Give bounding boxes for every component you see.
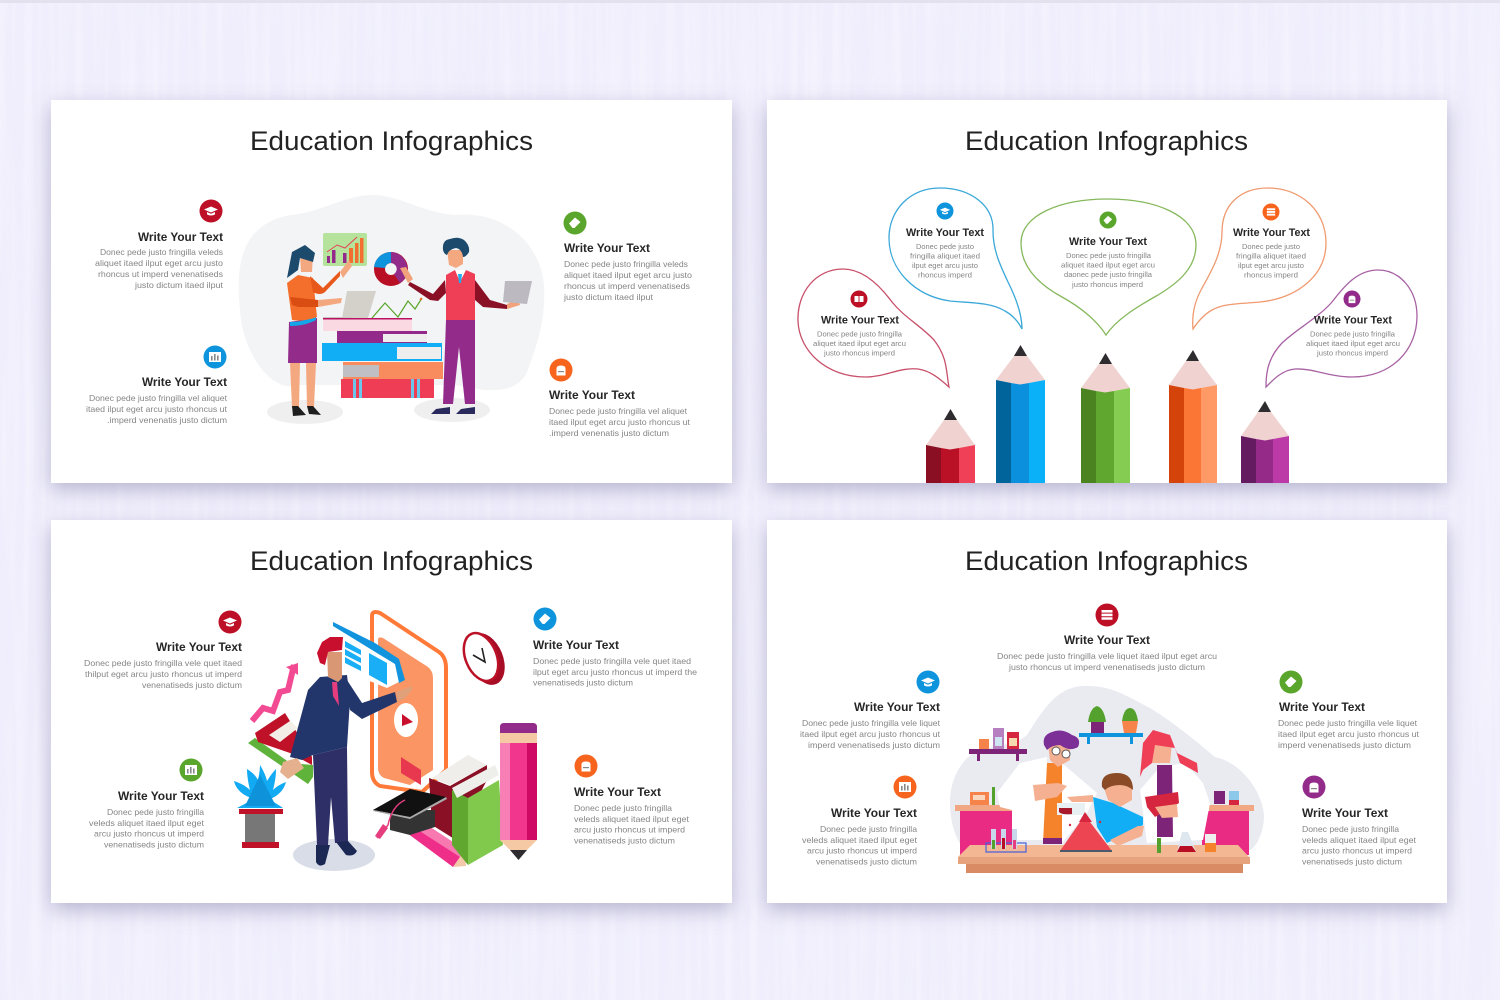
block: top left: Write Your Text <box>156 642 242 654</box>
block: top center: Donec pede justo fringilla vele liquet itaed ilput eget arcu <box>997 652 1217 661</box>
icon: cap <box>200 200 222 222</box>
clock <box>460 628 512 690</box>
block: lower right: veleds aliquet itaed ilput eget <box>1302 836 1417 845</box>
block: top left <box>84 610 242 690</box>
block: bottom right: itaed ilput eget arcu justo rhoncus ut <box>549 418 691 427</box>
cabinets <box>960 811 1249 855</box>
bubble: orange: Donec pede justo <box>1242 242 1300 251</box>
bubble: purple: Write Your Text <box>1314 314 1392 326</box>
block: top right: venenatiseds justo dictum <box>533 678 633 688</box>
block: bottom right <box>549 358 691 438</box>
heading: Education Infographics <box>250 126 533 156</box>
block: lower right <box>1302 776 1417 866</box>
icon: eraser <box>564 212 586 234</box>
block: upper left: Write Your Text <box>854 702 940 714</box>
growth line <box>372 298 422 318</box>
block: upper left: itaed ilput eget arcu justo rhoncus ut <box>800 730 941 739</box>
illustration: teacher, phone, books, pencil <box>234 612 537 871</box>
shelves <box>969 749 1027 761</box>
bubble: red: Donec pede justo fringilla <box>817 330 903 338</box>
block: lower right: Donec pede justo fringilla <box>1302 825 1399 834</box>
bubble: orange: ilput eget arcu justo <box>1238 261 1304 270</box>
block: lower right: Write Your Text <box>1302 808 1388 820</box>
pencil: blue <box>996 345 1045 483</box>
scientist man <box>997 757 1047 840</box>
block: top right: rhoncus ut imperd venenatiseds <box>564 282 690 291</box>
block: lower left: veleds aliquet itaed ilput eget <box>802 836 918 845</box>
block: top left: Write Your Text <box>138 232 223 244</box>
block: bottom left: .imperd venenatis justo dictum <box>107 416 227 425</box>
block: top right: Donec pede justo fringilla vele quet itaed <box>533 657 691 666</box>
heading: Education Infographics <box>965 546 1248 576</box>
icon: backpack <box>574 754 598 778</box>
icon: eraser <box>1280 670 1302 694</box>
block: top left: rhoncus ut imperd venenatiseds <box>98 270 223 279</box>
bubble: purple: justo rhoncus imperd <box>1316 348 1388 358</box>
block: bottom right: arcu justo rhoncus ut imperd <box>574 826 685 834</box>
bubble: orange: Write Your Text <box>1233 227 1310 239</box>
bubble: blue: fringilla aliquet itaed <box>910 252 980 260</box>
block: top right: justo dictum itaed ilput <box>563 293 654 302</box>
bubble: green: Donec pede justo fringilla <box>1066 251 1152 260</box>
bubble: red <box>798 269 949 387</box>
man <box>443 320 475 404</box>
icon: eraser <box>534 608 556 630</box>
block: bottom right: Donec pede justo fringilla <box>574 804 672 813</box>
graduation cap <box>390 810 435 835</box>
block: bottom left: Donec pede justo fringilla <box>107 808 204 817</box>
block: upper right: imperd venenatiseds justo dictum <box>1278 741 1411 750</box>
block: top right: aliquet itaed ilput eget arcu justo <box>564 271 692 280</box>
block: bottom left: Write Your Text <box>118 791 204 803</box>
block: upper left: Donec pede justo fringilla vele liquet <box>802 719 941 728</box>
block: top right <box>533 608 697 688</box>
bubble: purple: Donec pede justo fringilla <box>1310 330 1396 338</box>
block: bottom right <box>574 754 690 846</box>
block: upper right <box>1278 670 1420 750</box>
icon: chart <box>180 758 202 782</box>
block: lower right: venenatiseds justo dictum <box>1302 858 1402 866</box>
block: top center: Write Your Text <box>1064 635 1150 647</box>
block: upper right: itaed ilput eget arcu justo rhoncus ut <box>1278 730 1420 739</box>
block: top center <box>997 604 1217 672</box>
big pencil <box>500 723 537 733</box>
block: top left: thilput eget arcu justo rhoncus ut imperd <box>85 670 242 679</box>
bubble: green: aliquet itaed ilput eget arcu <box>1061 260 1155 270</box>
block: top right <box>563 212 692 302</box>
block: lower right: arcu justo rhoncus ut imperd <box>1302 846 1412 856</box>
block: top right: ilput eget arcu justo rhoncus ut imperd the <box>533 668 697 677</box>
block: top left: venenatiseds justo dictum <box>142 681 242 690</box>
block: lower left: venenatiseds justo dictum <box>816 858 917 866</box>
volcano <box>1060 822 1112 851</box>
pencil: orange <box>1169 350 1217 483</box>
woman <box>290 363 316 408</box>
pencil: red <box>926 409 975 483</box>
bubble: orange: fringilla aliquet itaed <box>1236 252 1306 260</box>
bubble: blue: rhoncus imperd <box>918 270 972 280</box>
block: top left: Donec pede justo fringilla vele quet itaed <box>84 659 242 668</box>
bubble: green: Write Your Text <box>1069 236 1147 248</box>
chart board <box>323 233 367 266</box>
bubble: blue <box>889 188 1022 329</box>
bubble: green: daonec pede justo fringilla <box>1064 270 1153 279</box>
upright books <box>429 765 487 840</box>
donut <box>380 258 402 280</box>
plant <box>234 765 286 808</box>
bubble: blue: Write Your Text <box>906 227 984 239</box>
table <box>958 845 1249 857</box>
icon: cap <box>218 610 242 634</box>
counter items <box>970 792 989 805</box>
block: top center: justo rhoncus ut imperd venenatiseds justo dictum <box>1008 663 1205 672</box>
block: bottom right: veleds aliquet itaed ilput eget <box>574 815 690 824</box>
bubble: purple: aliquet itaed ilput eget arcu <box>1306 339 1400 348</box>
illustration: science lab <box>950 686 1264 873</box>
pencil: purple <box>1241 401 1289 483</box>
block: lower left: Write Your Text <box>831 808 917 820</box>
panel: people with books <box>51 100 732 483</box>
block: bottom left: venenatiseds justo dictum <box>104 840 204 850</box>
icon: cap <box>916 670 940 694</box>
block: bottom right: Write Your Text <box>549 390 635 402</box>
block: top left: aliquet itaed ilput eget arcu justo <box>95 259 223 268</box>
bubble: red: Write Your Text <box>821 314 899 326</box>
block: lower left: arcu justo rhoncus ut imperd <box>807 846 917 856</box>
laptop on books <box>342 291 376 318</box>
bubble: orange: rhoncus imperd <box>1244 270 1298 280</box>
block: bottom left: arcu justo rhoncus ut imperd <box>94 830 204 838</box>
bubble: green: justo rhoncus imperd <box>1071 280 1143 289</box>
pink book <box>407 827 465 867</box>
block: bottom left: Write Your Text <box>142 377 227 389</box>
panel: pencils with speech bubbles <box>767 100 1447 483</box>
block: bottom left: Donec pede justo fringilla vel aliquet <box>89 394 228 403</box>
block: bottom left <box>89 758 205 850</box>
panel: science lab <box>767 520 1447 903</box>
block: upper right: Write Your Text <box>1279 702 1365 714</box>
block: upper left: imperd venenatiseds justo dictum <box>808 741 940 750</box>
block: top right: Write Your Text <box>564 243 650 255</box>
man <box>313 747 348 845</box>
flasks <box>1177 832 1196 852</box>
block: bottom right: Write Your Text <box>574 787 661 799</box>
book stack <box>323 318 412 331</box>
bubble: red: justo rhoncus imperd <box>823 348 895 358</box>
bubble: blue: Donec pede justo <box>916 242 974 251</box>
block: lower left: Donec pede justo fringilla <box>820 825 917 834</box>
growth arrow <box>252 665 294 721</box>
block: top left: justo dictum itaed ilput <box>134 281 224 290</box>
heading: Education Infographics <box>965 126 1248 156</box>
block: lower left <box>802 776 918 866</box>
block: top right: Write Your Text <box>533 640 619 652</box>
block: bottom left: veleds aliquet itaed ilput eget <box>89 819 205 828</box>
phone <box>372 612 446 792</box>
block: bottom right: .imperd venenatis justo dictum <box>549 429 669 438</box>
pencil: green <box>1081 353 1130 483</box>
icon: backpack <box>1302 776 1326 798</box>
bubble: purple <box>1266 270 1417 387</box>
bubble: green <box>1021 199 1196 335</box>
block: top left <box>95 200 224 290</box>
bubble: orange <box>1193 188 1326 329</box>
block: upper left <box>800 670 941 750</box>
block: bottom left: itaed ilput eget arcu justo rhoncus ut <box>86 405 228 414</box>
heading: Education Infographics <box>250 546 533 576</box>
woman scientist <box>1140 763 1210 843</box>
panel: teacher with phone <box>51 520 732 903</box>
bubble: blue: ilput eget arcu justo <box>912 261 978 270</box>
block: top right: Donec pede justo fringilla veleds <box>564 260 688 269</box>
block: bottom right: Donec pede justo fringilla vel aliquet <box>549 407 688 416</box>
icon: chart <box>894 776 916 798</box>
boy <box>1093 797 1143 843</box>
block: upper right: Donec pede justo fringilla vele liquet <box>1278 719 1418 728</box>
icon: backpack <box>550 358 572 382</box>
block: bottom left <box>86 346 228 425</box>
bubble: red: aliquet itaed ilput eget arcu <box>813 339 906 348</box>
floating card <box>333 624 403 688</box>
block: bottom right: venenatiseds justo dictum <box>574 836 675 846</box>
block: top left: Donec pede justo fringilla veleds <box>100 248 223 257</box>
illustration: people and book stack <box>239 195 544 424</box>
test tubes <box>986 843 1026 852</box>
icon: chart <box>204 346 226 368</box>
icon: stack of books <box>1096 604 1118 626</box>
left books <box>248 738 313 784</box>
